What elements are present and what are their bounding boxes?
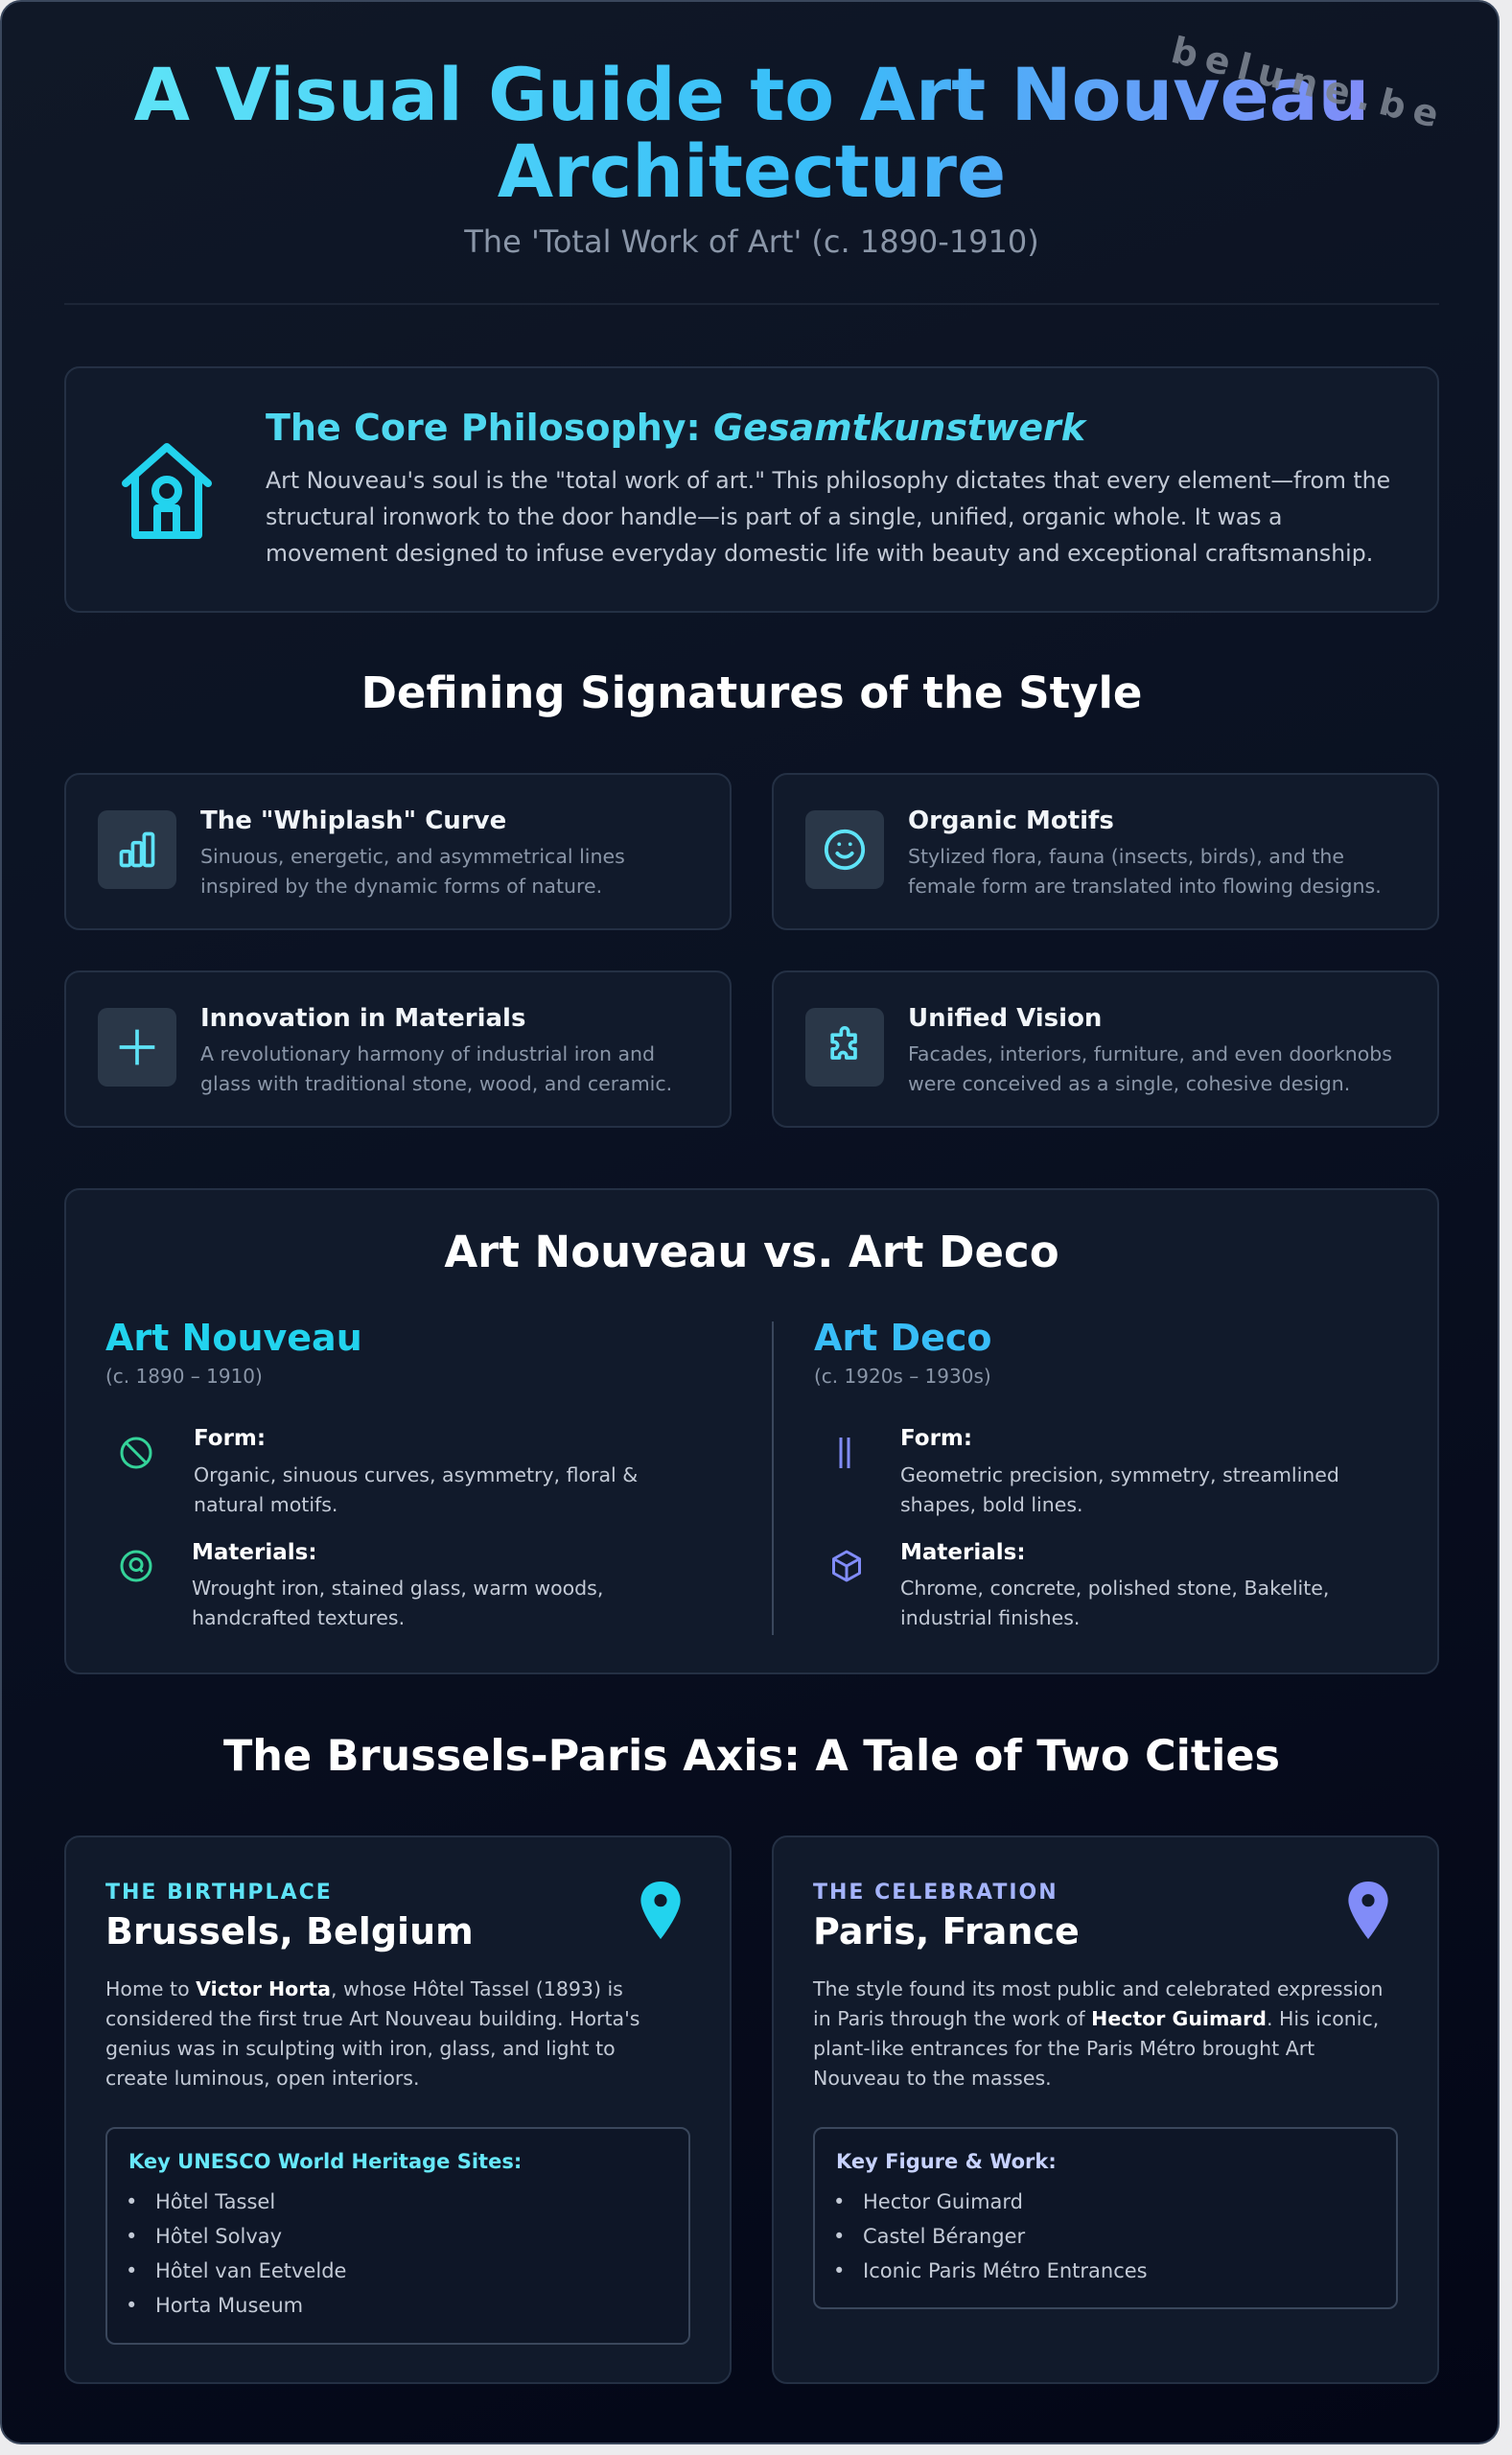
card: organic motifs [772, 773, 1439, 930]
box: key figure: Key Figure & Work: [836, 2150, 1057, 2173]
box: key figure: Hector Guimard [863, 2190, 1023, 2213]
heading: defining signatures: Defining Signatures of the Style [361, 667, 1142, 718]
box: key figure: Iconic Paris Métro Entrances [863, 2259, 1148, 2282]
column: art nouveau: Art Nouveau [105, 1317, 362, 1359]
icon: plus [98, 1008, 176, 1087]
heading: The Core Philosophy: Gesamtkunstwerk [266, 407, 1085, 449]
icon: house [122, 443, 212, 539]
box: key figure [813, 2127, 1398, 2309]
card: innovation: A revolutionary harmony of industrial iron and glass with traditional stone, wood, and ceramic. [200, 1042, 672, 1095]
panel: core philosophy [64, 366, 1439, 613]
box: unesco sites: Key UNESCO World Heritage Sites: [128, 2150, 522, 2173]
watermark: belune.be [1167, 29, 1452, 138]
column: art nouveau: (c. 1890 – 1910) [105, 1365, 263, 1388]
box: unesco sites: Hôtel Solvay [155, 2225, 282, 2248]
icon: form [121, 1437, 151, 1469]
column: art deco [814, 1317, 1339, 1629]
icon: materials [121, 1550, 151, 1582]
card: organic motifs: Organic Motifs [908, 807, 1114, 835]
card: unified vision: Unified Vision [908, 1004, 1102, 1033]
card: brussels: THE BIRTHPLACE [105, 1881, 333, 1905]
card: paris: THE CELEBRATION [813, 1881, 1058, 1905]
column: art nouveau: Wrought iron, stained glass, warm woods, handcrafted textures. [192, 1577, 603, 1629]
card: brussels: Brussels, Belgium [105, 1910, 474, 1952]
column: art deco: Geometric precision, symmetry, streamlined shapes, bold lines. [900, 1463, 1339, 1516]
card: unified vision: Facades, interiors, furniture, and even doorknobs were conceived as a single, cohesive design. [908, 1042, 1392, 1095]
icon: smile [805, 810, 884, 889]
card: paris [772, 1835, 1439, 2384]
icon: lines [840, 1438, 849, 1468]
box: unesco sites [105, 2127, 690, 2345]
title [134, 53, 1369, 214]
icon: puzzle [805, 1008, 884, 1087]
card: innovation [64, 970, 732, 1128]
panel: comparison [64, 1188, 1439, 1674]
subtitle: The 'Total Work of Art' (c. 1890-1910) [464, 223, 1039, 260]
card: brussels: Home to Victor Horta, whose Hôtel Tassel (1893) is considered the first true Art Nouveau building. Horta's genius was in sculpting with iron, glass, and light to create luminous, open interiors. [105, 1977, 640, 2090]
box: key figure: Castel Béranger [863, 2225, 1025, 2248]
card: organic motifs: Stylized flora, fauna (insects, birds), and the female form are translated into flowing designs. [908, 845, 1382, 898]
column: art nouveau [105, 1317, 638, 1629]
icon: pin [640, 1882, 681, 1939]
column: art nouveau: Form: [194, 1426, 266, 1451]
box: unesco sites: Hôtel Tassel [155, 2190, 275, 2213]
card: whiplash [64, 773, 732, 930]
card: brussels [64, 1835, 732, 2384]
box: unesco sites: Horta Museum [155, 2294, 303, 2317]
column: art deco: Chrome, concrete, polished stone, Bakelite, industrial finishes. [900, 1577, 1329, 1629]
column: art deco: Materials: [900, 1540, 1026, 1565]
column: art nouveau: Materials: [192, 1540, 317, 1565]
heading: Art Nouveau vs. Art Deco [444, 1227, 1059, 1277]
box: unesco sites: Hôtel van Eetvelde [155, 2259, 346, 2282]
title: Architecture [498, 129, 1006, 214]
column: art nouveau: Organic, sinuous curves, asymmetry, floral & natural motifs. [194, 1463, 638, 1516]
icon: bars [98, 810, 176, 889]
column: art deco: Form: [900, 1426, 972, 1451]
card: innovation: Innovation in Materials [200, 1004, 525, 1033]
body text: Art Nouveau's soul is the "total work of art." This philosophy dictates that every element—from the structural ironwork to the door handle—is part of a single, unified, organic whole. It was a movement designed to infuse everyday domestic life with beauty and exceptional craftsmanship. [266, 467, 1390, 567]
card: whiplash: The "Whiplash" Curve [200, 807, 506, 835]
column: art deco: Art Deco [814, 1317, 991, 1359]
card: paris: The style found its most public and celebrated expression in Paris through the work of Hector Guimard. His iconic, plant-like entrances for the Paris Métro brought Art Nouveau to the masses. [813, 1977, 1383, 2090]
card: unified vision [772, 970, 1439, 1128]
card: paris: Paris, France [813, 1910, 1080, 1952]
icon: pin [1348, 1882, 1388, 1939]
heading: brussels-paris: The Brussels-Paris Axis: A Tale of Two Cities [223, 1732, 1280, 1781]
column: art deco: (c. 1920s – 1930s) [814, 1365, 991, 1388]
title: A Visual Guide to Art Nouveau [134, 53, 1369, 137]
icon: cube [832, 1550, 861, 1582]
card: whiplash: Sinuous, energetic, and asymmetrical lines inspired by the dynamic forms of nature. [200, 845, 625, 898]
